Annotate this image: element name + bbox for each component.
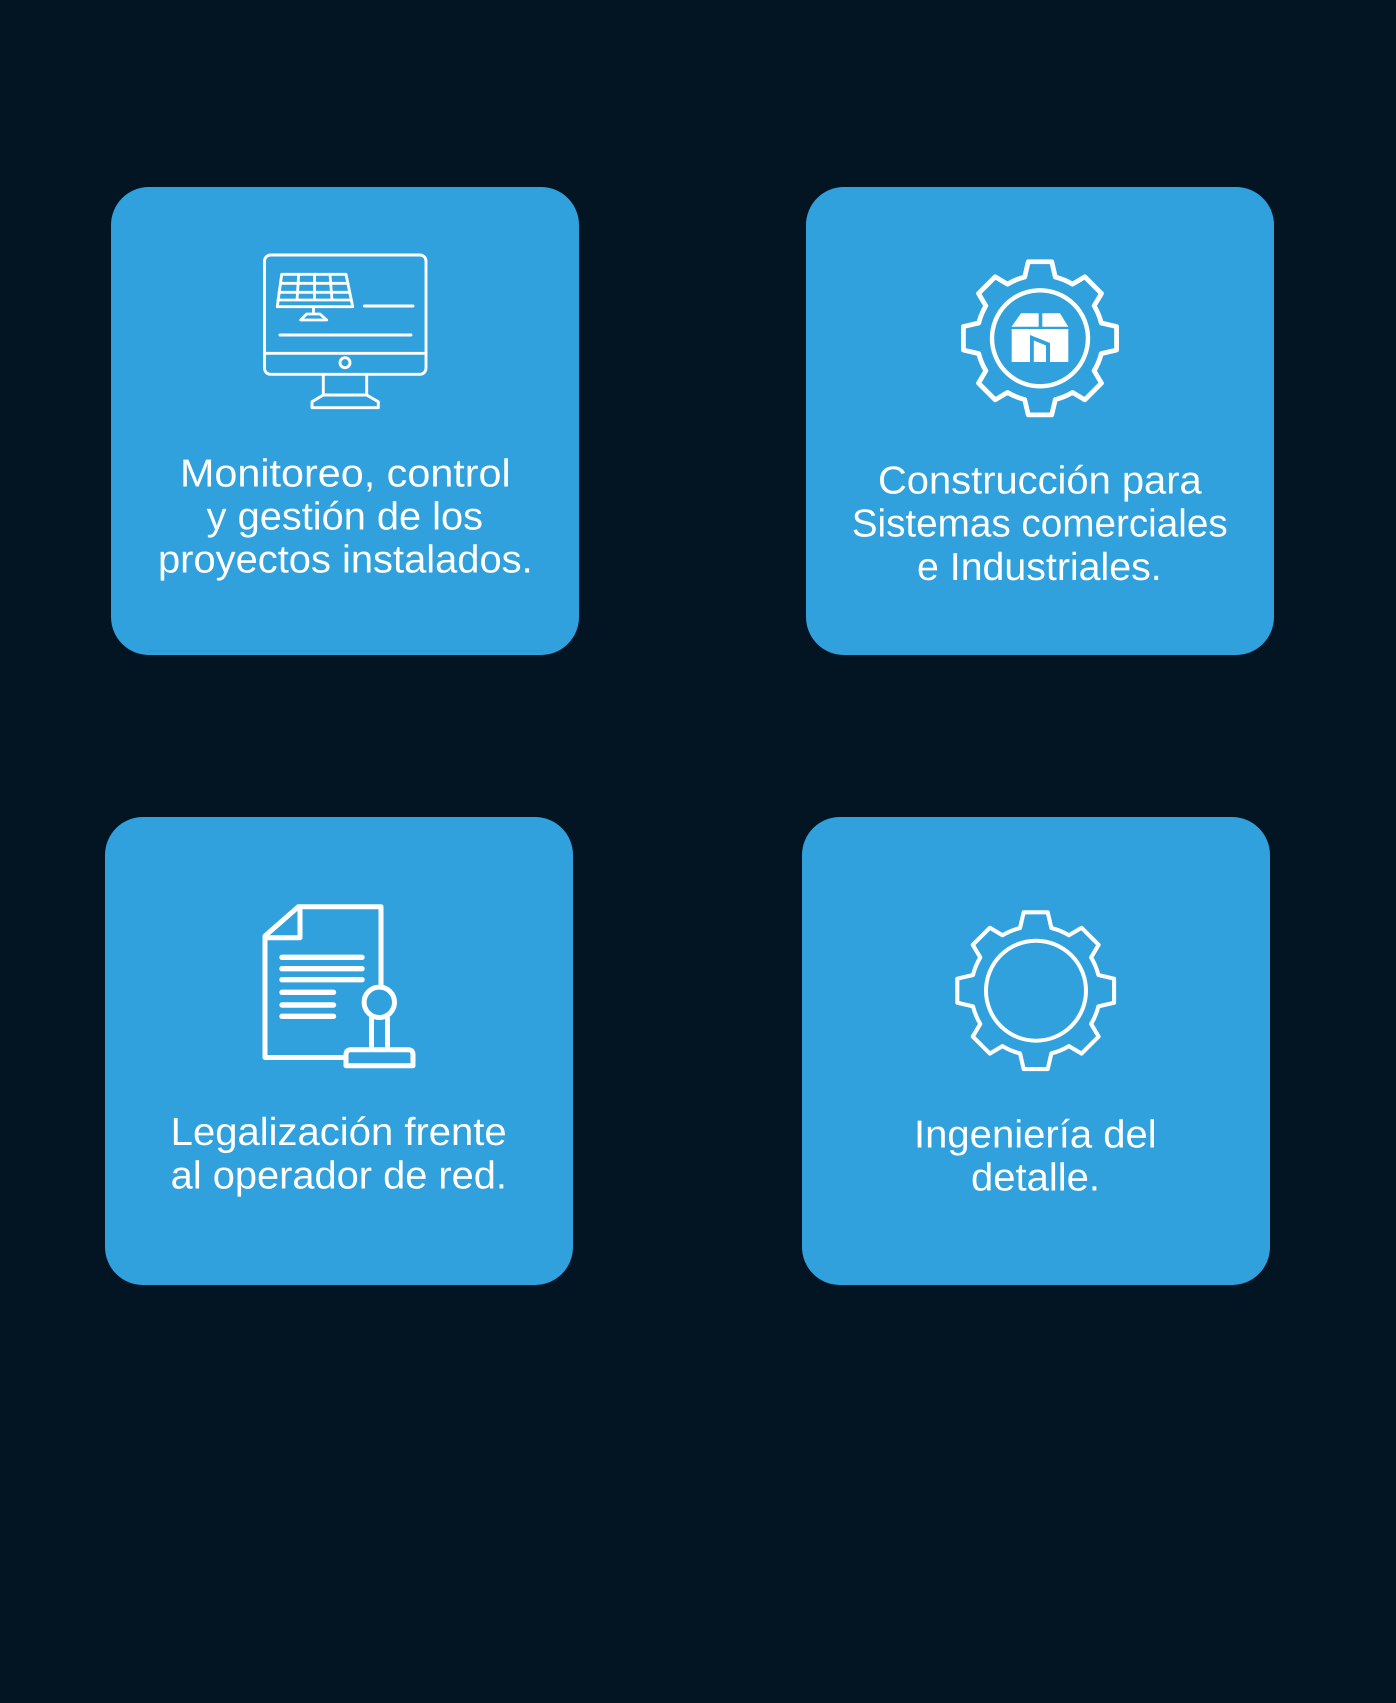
icon: document with stamp <box>265 907 413 1066</box>
card background <box>105 817 573 1285</box>
text: construccion: Sistemas comerciales <box>852 503 1228 546</box>
icon: gear with building <box>963 262 1117 415</box>
panel: ingenieria <box>802 817 1270 1285</box>
text: ingenieria: Ingeniería del <box>914 1113 1157 1156</box>
text: monitoreo: y gestión de los <box>207 496 483 538</box>
text: legalizacion: Legalización frente <box>171 1111 507 1154</box>
text: construccion: Construcción para <box>878 459 1202 502</box>
text: construccion: e Industriales. <box>917 546 1162 589</box>
text: construccion <box>852 459 1228 589</box>
panel: monitoreo <box>111 187 579 655</box>
card background <box>802 817 1270 1285</box>
panel: legalizacion <box>105 817 573 1285</box>
text: legalizacion: al operador de red. <box>171 1154 507 1197</box>
card background <box>111 187 579 655</box>
text: monitoreo: Monitoreo, control <box>180 453 511 496</box>
text: ingenieria <box>914 1113 1157 1200</box>
text: monitoreo <box>158 453 533 581</box>
icon: gear <box>957 912 1114 1069</box>
text: monitoreo: proyectos instalados. <box>158 538 533 581</box>
card background <box>806 187 1274 655</box>
text: legalizacion <box>171 1111 507 1197</box>
panel: construccion <box>806 187 1274 655</box>
text: ingenieria: detalle. <box>971 1157 1100 1200</box>
icon: monitor with solar panel <box>264 255 426 408</box>
